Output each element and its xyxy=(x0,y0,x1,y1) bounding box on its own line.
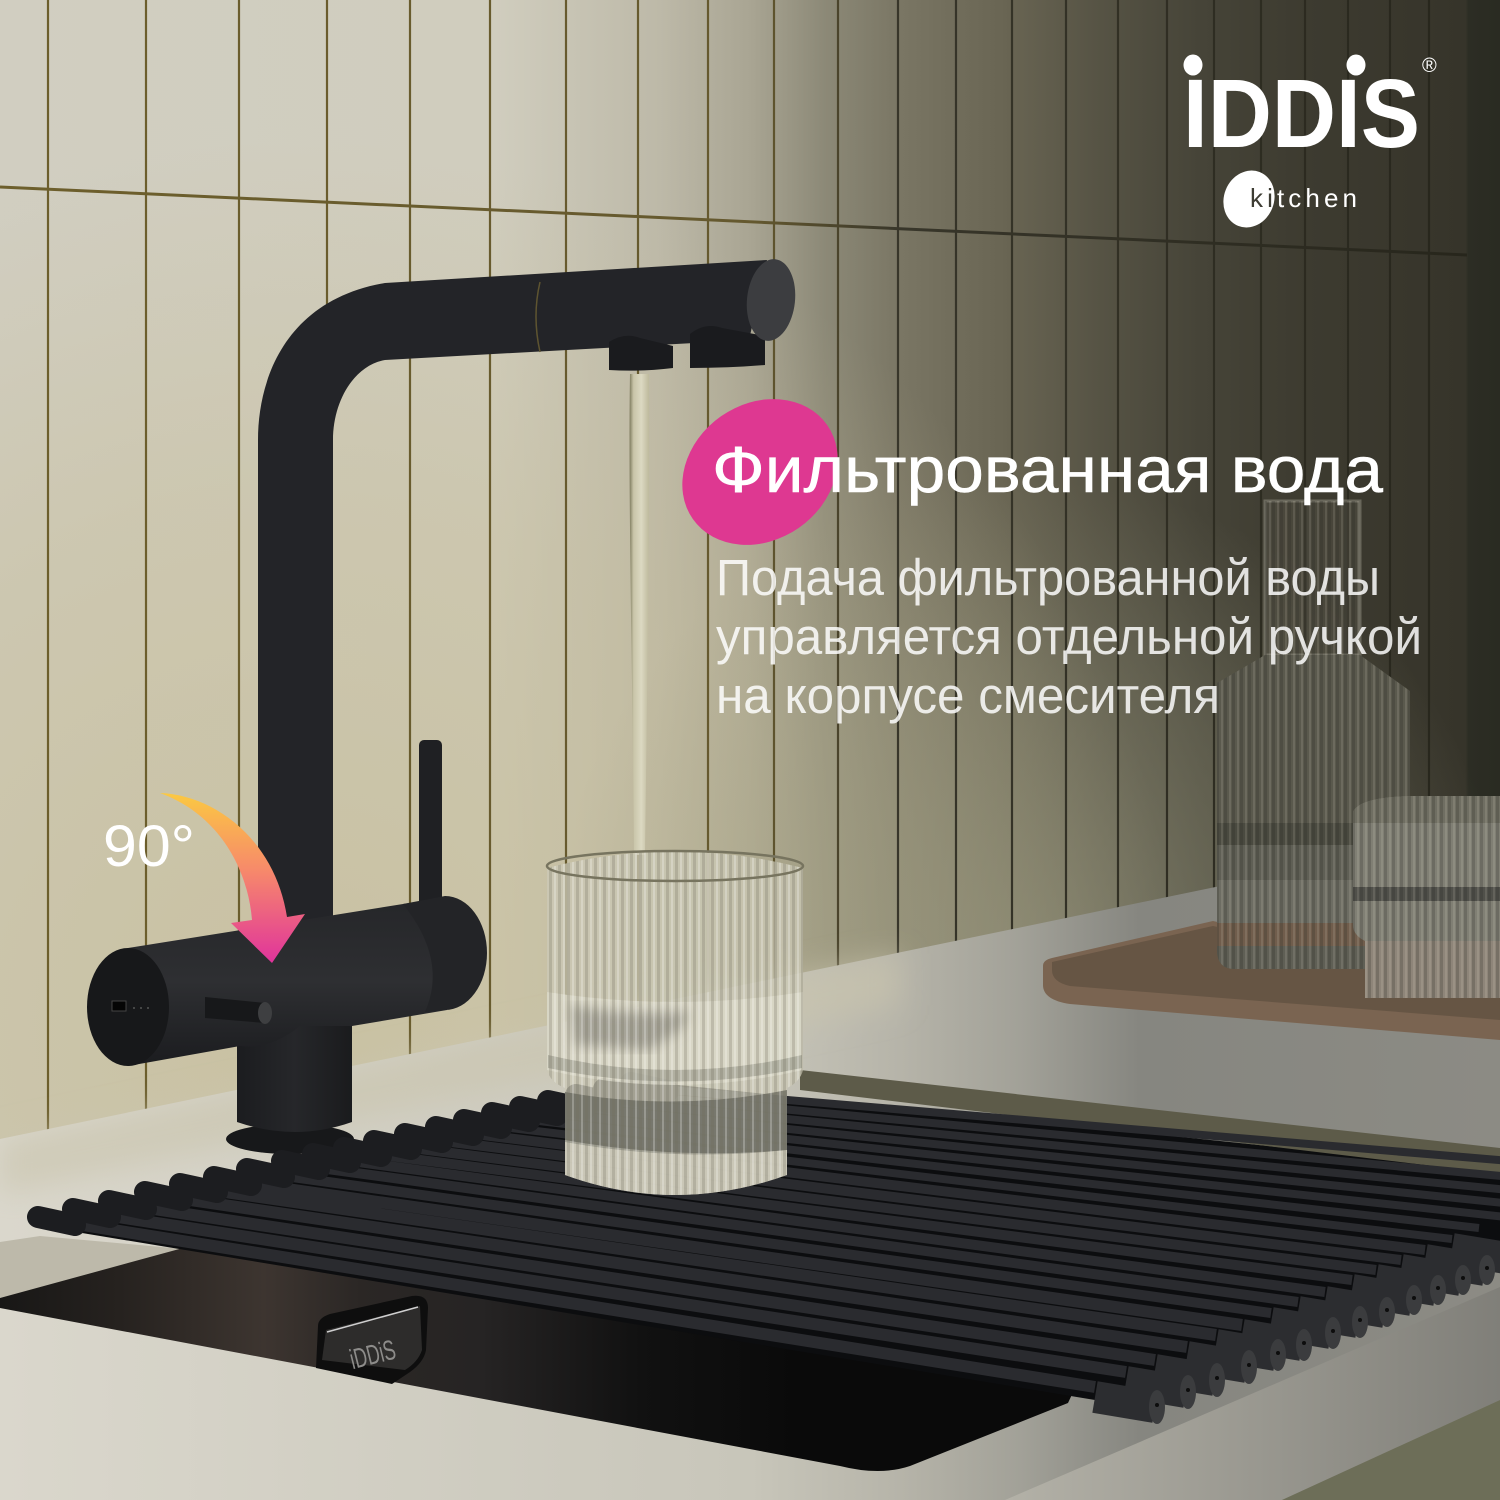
filter handle rod xyxy=(419,740,442,910)
wall background xyxy=(0,0,1500,1200)
drying rack xyxy=(38,1070,1500,1424)
rods, middle rows xyxy=(285,1134,1425,1313)
side lever xyxy=(205,997,265,1023)
body text: управляется отдельной ручкой xyxy=(716,608,1422,665)
faucet base disc xyxy=(226,1124,354,1154)
kitchen wordmark: kitchen xyxy=(1250,183,1357,213)
countertop xyxy=(0,828,1500,1500)
left caps xyxy=(38,1083,668,1225)
right caps xyxy=(1095,1249,1500,1407)
rack shadow fill xyxy=(76,1084,1500,1400)
logo blob xyxy=(1215,163,1283,235)
right control xyxy=(403,896,487,1012)
sink logo plaque: iDDiS xyxy=(347,1334,399,1375)
faucet xyxy=(87,257,799,1154)
water stream xyxy=(630,374,649,855)
logo: IDDIS xyxy=(1183,59,1420,168)
rotation arrow xyxy=(160,793,305,963)
wall tile joints xyxy=(0,0,1467,1200)
carafe body xyxy=(1217,655,1410,969)
body text: на корпусе смесителя xyxy=(716,667,1220,724)
logo xyxy=(1183,54,1437,235)
cap holes xyxy=(1155,1266,1489,1407)
carafe xyxy=(1217,501,1410,969)
faucet neck and spout xyxy=(258,260,767,930)
heading: Фильтрованная вода xyxy=(712,433,1384,506)
sink xyxy=(0,1236,1075,1471)
sink left lip xyxy=(0,1236,194,1298)
heading blob xyxy=(654,369,866,575)
logo: ® xyxy=(1422,55,1437,77)
body text xyxy=(716,549,1422,724)
left end cap xyxy=(87,948,169,1066)
spout nozzles xyxy=(609,326,765,371)
spout seam xyxy=(536,282,540,352)
90 degrees label: 90° xyxy=(103,814,195,879)
carafe neck xyxy=(1265,501,1360,655)
body text: Подача фильтрованной воды xyxy=(716,549,1380,606)
front counter edge xyxy=(1005,1287,1500,1500)
end cap indicator xyxy=(112,1001,149,1011)
spout end cap xyxy=(743,257,799,343)
ribbed glass xyxy=(547,851,803,1195)
faucet lower body xyxy=(237,1000,352,1132)
rods, front rows xyxy=(76,1184,1242,1387)
rack back edge shadow xyxy=(800,1070,1500,1174)
horizontal body xyxy=(128,897,447,1066)
sink logo plaque xyxy=(316,1296,428,1384)
small glass, right xyxy=(1353,796,1500,998)
lower right cabinet front xyxy=(1282,1400,1500,1500)
rods, back rows xyxy=(502,1090,1500,1239)
tray xyxy=(1043,921,1500,1040)
cap end faces xyxy=(1149,1255,1495,1424)
